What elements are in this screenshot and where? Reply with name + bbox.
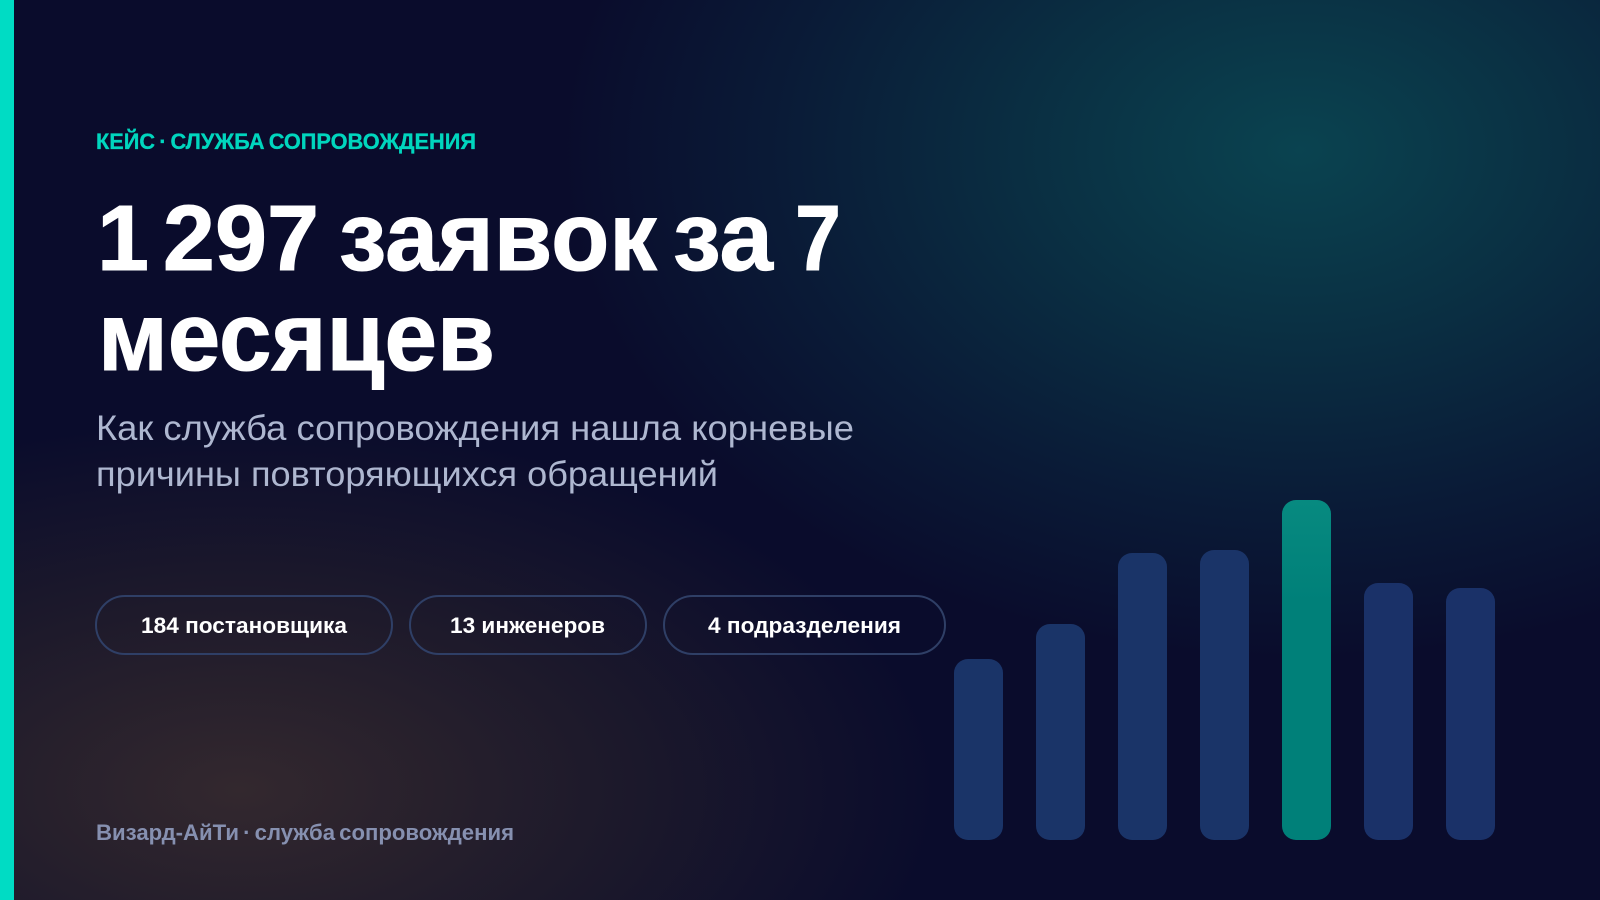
bar 1 (954, 659, 1003, 840)
chips (96, 596, 945, 654)
chip: requesters (96, 596, 392, 654)
chip: engineers (410, 596, 646, 654)
bar 4 (1200, 550, 1249, 840)
title: за (673, 182, 774, 291)
chip: engineers: 13 инженеров (450, 613, 605, 638)
bar 7 (1446, 588, 1495, 840)
title: 1 297 (97, 186, 319, 290)
title (97, 182, 841, 391)
title: 7 (795, 186, 841, 290)
bar 5: highlighted (1282, 500, 1331, 840)
chip: requesters: 184 постановщика (141, 613, 348, 638)
bar chart (954, 500, 1495, 840)
subtitle: Как служба сопровождения нашла корневые (96, 409, 854, 448)
subtitle: причины повторяющихся обращений (96, 455, 718, 494)
bar 2 (1036, 624, 1085, 840)
accent stripe (0, 0, 14, 900)
title: заявок (339, 182, 657, 291)
bar 3 (1118, 553, 1167, 840)
subtitle (96, 409, 854, 494)
chip: departments (664, 596, 945, 654)
footer: Визард-АйТи · служба сопровождения (96, 820, 514, 845)
eyebrow label: КЕЙС · СЛУЖБА СОПРОВОЖДЕНИЯ (96, 129, 476, 154)
bar 6 (1364, 583, 1413, 840)
chip: departments: 4 подразделения (708, 613, 901, 638)
title: месяцев (98, 282, 495, 391)
